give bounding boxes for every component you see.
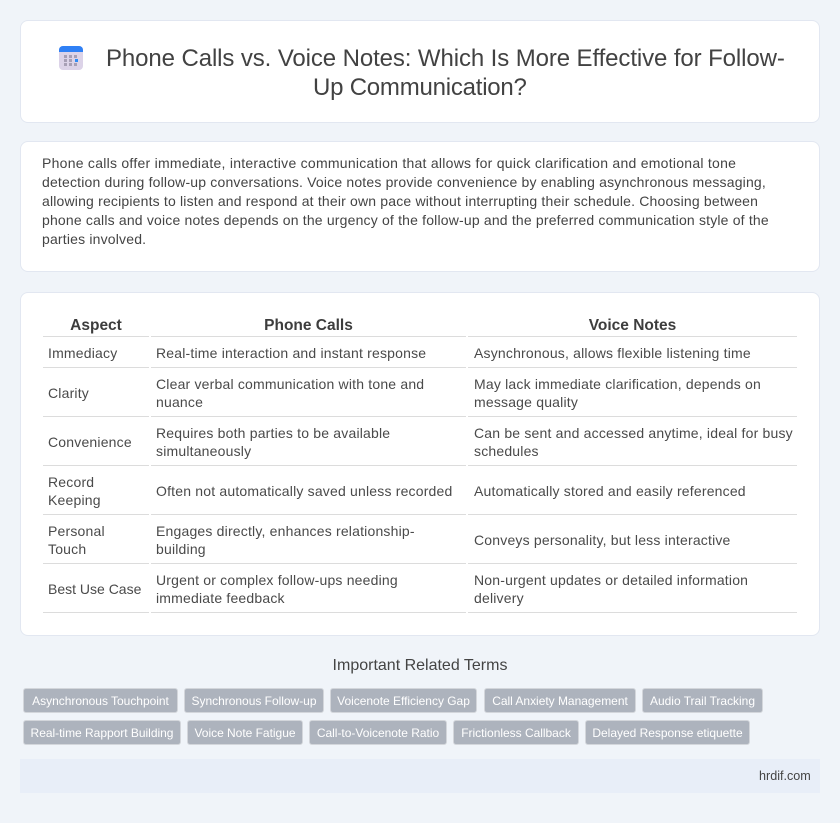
table: phone calls vs voice notes: May lack immediate clarification, depends on [474,376,761,392]
intro text: detection during follow-up conversations. Voice notes provide convenience by enabling asynchronous messaging, [42,174,766,190]
related term tags: Call Anxiety Management [492,694,628,708]
table: phone calls vs voice notes: message quality [474,394,578,410]
table: phone calls vs voice notes: Record [48,474,94,490]
title [106,45,785,101]
table: phone calls vs voice notes: nuance [156,394,203,410]
intro text: allowing recipients to listen and respond at their own pace without interrupting their schedule. Choosing between [42,193,758,209]
table: phone calls vs voice notes: Engages directly, enhances relationship- [156,523,415,539]
table: phone calls vs voice notes: Voice Notes [589,317,676,334]
table: phone calls vs voice notes: Can be sent and accessed anytime, ideal for busy [474,425,793,441]
table: phone calls vs voice notes: Aspect [70,317,122,334]
table: phone calls vs voice notes: Immediacy [48,345,117,361]
intro text: Phone calls offer immediate, interactive communication that allows for quick clarification and emotional tone [42,155,736,171]
table: phone calls vs voice notes [43,317,797,613]
intro text [42,155,769,247]
intro text: phone calls and voice notes depends on the urgency of the follow-up and the preferred communication style of the [42,212,769,228]
table: phone calls vs voice notes: Asynchronous, allows flexible listening time [474,345,751,361]
table: phone calls vs voice notes: building [156,541,206,557]
table: phone calls vs voice notes: Phone Calls [264,317,353,334]
header panel [20,20,820,123]
table: phone calls vs voice notes: Clear verbal communication with tone and [156,376,424,392]
icon: calendar [59,46,83,70]
table: phone calls vs voice notes: Urgent or complex follow-ups needing [156,572,398,588]
related terms heading: Important Related Terms [333,657,507,674]
table: phone calls vs voice notes: Keeping [48,492,101,508]
table: phone calls vs voice notes: Touch [48,541,86,557]
table: phone calls vs voice notes: Conveys personality, but less interactive [474,532,731,548]
table: phone calls vs voice notes: Best Use Case [48,581,141,597]
related term tags: Real-time Rapport Building [31,726,173,740]
table: phone calls vs voice notes: Clarity [48,385,89,401]
related term tags: Delayed Response etiquette [592,726,743,740]
related term tags: Audio Trail Tracking [650,694,755,708]
table: phone calls vs voice notes: Real-time interaction and instant response [156,345,426,361]
related term tags: Asynchronous Touchpoint [32,694,169,708]
table: phone calls vs voice notes: Requires both parties to be available [156,425,390,441]
related term tags: Call-to-Voicenote Ratio [317,726,439,740]
table: phone calls vs voice notes: Automatically stored and easily referenced [474,483,746,499]
footer bar [20,759,820,793]
table: phone calls vs voice notes: delivery [474,590,524,606]
intro text: parties involved. [42,231,146,247]
table: phone calls vs voice notes: schedules [474,443,539,459]
table: phone calls vs voice notes: Often not automatically saved unless recorded [156,483,452,499]
comparison table panel [20,292,820,636]
title: Up Communication? [313,74,527,101]
intro panel [20,141,820,272]
related term tags: Voicenote Efficiency Gap [337,694,470,708]
table: phone calls vs voice notes: Non-urgent updates or detailed information [474,572,748,588]
footer credit: hrdif.com [759,769,811,783]
related term tags [23,688,763,745]
table: phone calls vs voice notes: simultaneously [156,443,251,459]
table: phone calls vs voice notes: immediate feedback [156,590,285,606]
related term tags: Voice Note Fatigue [194,726,296,740]
title: Phone Calls vs. Voice Notes: Which Is More Effective for Follow- [106,45,785,72]
table: phone calls vs voice notes: Personal [48,523,105,539]
table: phone calls vs voice notes: Convenience [48,434,132,450]
related term tags: Synchronous Follow-up [192,694,316,708]
related term tags: Frictionless Callback [461,726,571,740]
